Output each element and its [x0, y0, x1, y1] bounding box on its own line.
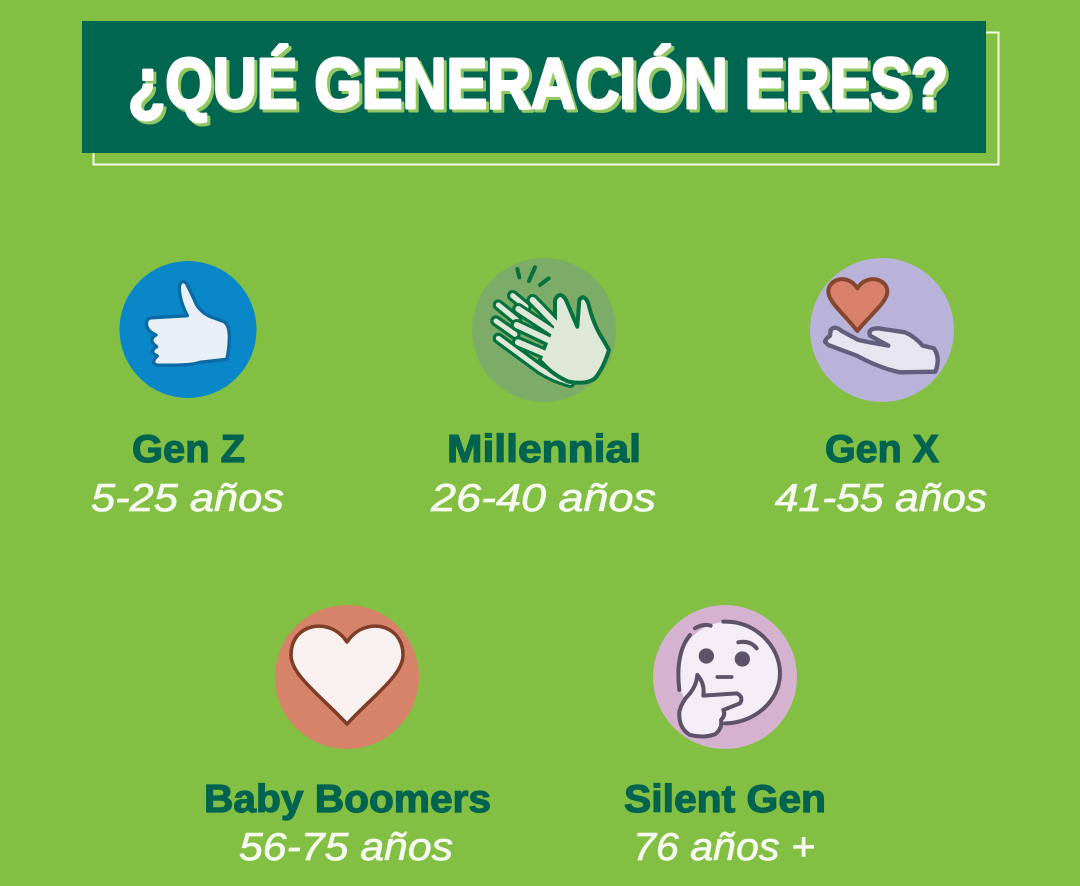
- age: 5-25 años: 5-25 años: [91, 477, 284, 520]
- age: 41-55 años: 41-55 años: [775, 477, 987, 520]
- Silent Gen: [624, 605, 826, 869]
- icon: heart: [275, 605, 419, 749]
- icon: hand holding heart: [810, 258, 954, 402]
- Gen X: [775, 258, 987, 520]
- label: Gen Z: Gen Z: [132, 428, 245, 471]
- icon: thinking face: [653, 605, 797, 749]
- Gen Z: [91, 261, 284, 520]
- age: 26-40 años: 26-40 años: [430, 477, 656, 520]
- Millennial: [430, 258, 656, 520]
- title: ¿QUÉ GENERACIÓN ERES?: [128, 45, 948, 124]
- icon: clapping hands: [472, 258, 616, 402]
- label: Baby Boomers: Baby Boomers: [204, 778, 491, 821]
- label: Millennial: Millennial: [447, 428, 641, 471]
- Baby Boomers: [204, 605, 491, 869]
- label: Silent Gen: Silent Gen: [624, 778, 826, 821]
- title banner: [82, 21, 998, 164]
- age: 76 años +: 76 años +: [633, 826, 815, 869]
- age: 56-75 años: 56-75 años: [239, 826, 453, 869]
- icon: thumbs up: [120, 261, 256, 398]
- label: Gen X: Gen X: [825, 428, 939, 471]
